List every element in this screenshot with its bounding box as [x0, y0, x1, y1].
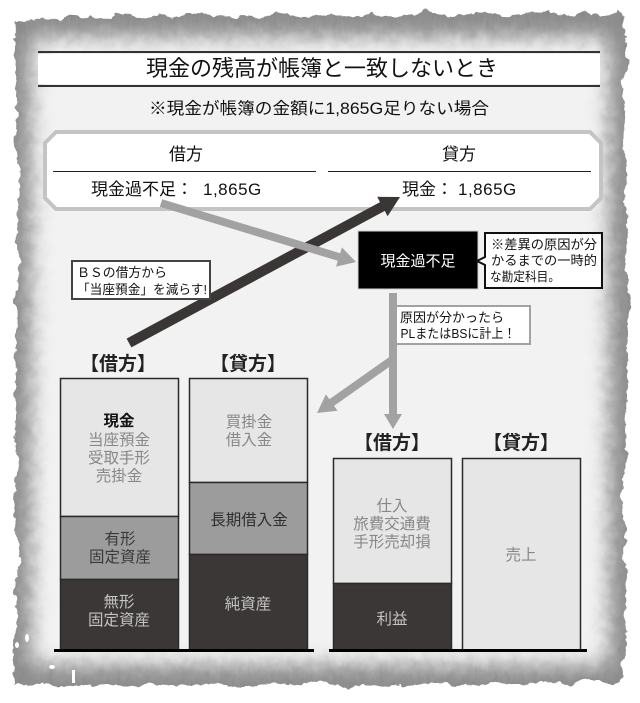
- callout: post when known: PLまたはBSに計上！: [400, 326, 516, 341]
- balance sheet debit column: 有形: [104, 530, 136, 548]
- credit entry: 現金：: [402, 180, 453, 199]
- debit heading: 借方: [169, 145, 203, 164]
- callout: reduce current deposit: ＢＳの借方から: [77, 265, 167, 280]
- balance sheet credit column: 純資産: [225, 595, 271, 613]
- note callout: かるまでの一時的: [491, 253, 597, 268]
- debit entry: 1,865G: [203, 180, 262, 199]
- credit heading: 貸方: [442, 145, 476, 164]
- income statement debit column: 利益: [376, 610, 408, 628]
- balance sheet credit column: 長期借入金: [210, 511, 288, 529]
- journal entry panel: [45, 132, 601, 209]
- subtitle: ※現金が帳簿の金額に1,865G足りない場合: [149, 99, 490, 118]
- debit entry: 現金過不足：: [91, 180, 193, 199]
- income statement debit column: 手形売却損: [353, 533, 431, 551]
- heading: 【貸方】: [210, 352, 286, 375]
- arrow: downward to P&L: [384, 293, 402, 429]
- heading: 【借方】: [80, 352, 156, 375]
- note callout: な勘定科目。: [490, 270, 560, 284]
- heading: 【貸方】: [483, 431, 559, 454]
- income statement debit column: 仕入: [376, 497, 408, 515]
- balance sheet debit column: 受取手形: [88, 449, 150, 467]
- balance sheet credit column: 借入金: [226, 431, 272, 449]
- white specks: [15, 634, 75, 683]
- balance sheet debit column: 当座預金: [88, 431, 150, 449]
- note callout: [477, 233, 602, 288]
- title band: [38, 51, 600, 87]
- arrow: branch to balance sheet: [317, 357, 394, 413]
- balance sheet debit column: 固定資産: [88, 611, 150, 629]
- balance sheet credit column: 買掛金: [226, 413, 272, 431]
- title: 現金の残高が帳簿と一致しないとき: [146, 56, 498, 81]
- balance sheet debit column: 無形: [103, 593, 135, 611]
- balance sheet debit column: [60, 352, 178, 650]
- callout: post when known: 原因が分かったら: [400, 310, 504, 325]
- callout: reduce current deposit: [72, 261, 210, 299]
- suspense account box: [358, 231, 478, 289]
- arrow: dark credit arrow: [127, 197, 400, 347]
- callout: reduce current deposit: 「当座預金」を減らす!: [77, 282, 207, 297]
- balance sheet debit column: 売掛金: [96, 467, 142, 485]
- balance sheet debit column: 固定資産: [89, 548, 151, 566]
- income statement credit column: [462, 431, 580, 650]
- credit entry: 1,865G: [458, 180, 517, 199]
- note callout: ※差異の原因が分: [491, 237, 597, 252]
- balance sheet credit column: [190, 352, 308, 650]
- income statement debit column: 旅費交通費: [353, 515, 431, 533]
- income statement debit column: [334, 431, 452, 650]
- balance sheet debit column: 現金: [103, 411, 135, 430]
- heading: 【借方】: [354, 431, 430, 454]
- suspense account box: 現金過不足: [380, 253, 456, 270]
- income statement credit column: 売上: [505, 546, 537, 564]
- arrow: gray to suspense account: [160, 199, 356, 267]
- callout: post when known: [396, 306, 530, 344]
